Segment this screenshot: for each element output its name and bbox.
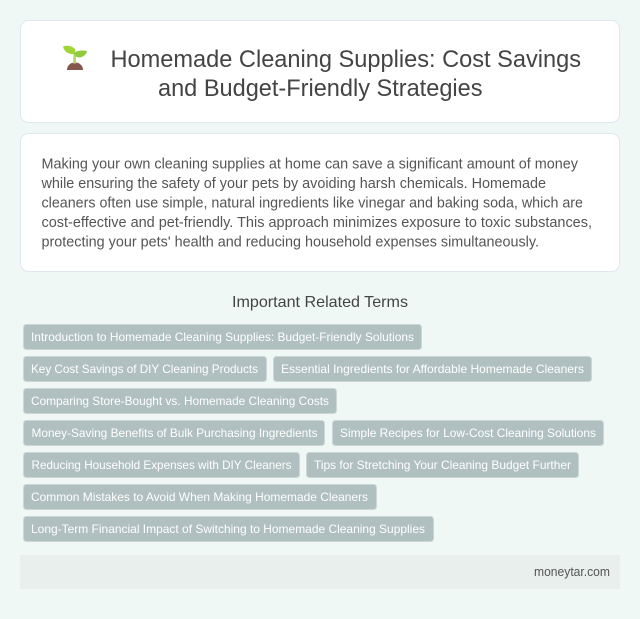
- tag: essential ingredients: Essential Ingredients for Affordable Homemade Cleaners: [281, 362, 584, 376]
- tag: common mistakes: Common Mistakes to Avoid When Making Homemade Cleaners: [31, 490, 368, 504]
- panel: title header: [20, 20, 620, 122]
- tag: long-term impact: [24, 516, 434, 542]
- text block: description paragraph: while ensuring the safety of your pets by avoiding harsh chemicals. Homemade: [41, 175, 546, 192]
- panel: related term tags: [24, 324, 604, 542]
- tag: introduction: [24, 324, 422, 350]
- tag: stretching budget: [306, 452, 578, 478]
- tag: stretching budget: Tips for Stretching Your Cleaning Budget Further: [314, 458, 571, 472]
- tag: key cost savings: Key Cost Savings of DIY Cleaning Products: [31, 362, 258, 376]
- footer: [20, 555, 620, 589]
- tag: reducing expenses: Reducing Household Expenses with DIY Cleaners: [32, 458, 292, 472]
- tag: introduction: Introduction to Homemade Cleaning Supplies: Budget-Friendly Solutions: [31, 330, 414, 344]
- tag: key cost savings: [24, 356, 266, 382]
- text block: description paragraph: Making your own cleaning supplies at home can save a significant amount of money: [42, 155, 578, 172]
- heading: title: [110, 46, 581, 102]
- panel: description: [20, 134, 620, 272]
- tag: reducing expenses: [24, 452, 300, 478]
- tag: essential ingredients: [274, 356, 592, 382]
- tag: long-term impact: Long-Term Financial Impact of Switching to Homemade Cleaning Supplies: [31, 522, 425, 536]
- text block: description paragraph: [41, 155, 592, 250]
- text block: description paragraph: protecting your pets' health and reducing household expenses simultaneously.: [42, 233, 539, 250]
- text block: description paragraph: cost-effective and pet-friendly. This approach minimizes exposure to toxic substances,: [42, 214, 592, 231]
- text: source: moneytar.com: [534, 565, 610, 579]
- tag: common mistakes: [24, 484, 376, 510]
- icon: sprout: [63, 46, 87, 70]
- tag: simple recipes: [332, 420, 604, 446]
- tag: comparing costs: [24, 388, 336, 414]
- tag: comparing costs: Comparing Store-Bought vs. Homemade Cleaning Costs: [31, 394, 329, 408]
- tag: bulk purchasing: [24, 420, 324, 446]
- heading: title: Homemade Cleaning Supplies: Cost Savings: [110, 46, 581, 73]
- text block: description paragraph: cleaners often use simple, natural ingredients like vinegar and baking soda, which are: [42, 194, 583, 211]
- heading: important related terms: Important Related Terms: [232, 294, 408, 311]
- tag: simple recipes: Simple Recipes for Low-Cost Cleaning Solutions: [340, 426, 596, 440]
- heading: title: and Budget-Friendly Strategies: [158, 75, 482, 102]
- tag: bulk purchasing: Money-Saving Benefits of Bulk Purchasing Ingredients: [32, 426, 318, 440]
